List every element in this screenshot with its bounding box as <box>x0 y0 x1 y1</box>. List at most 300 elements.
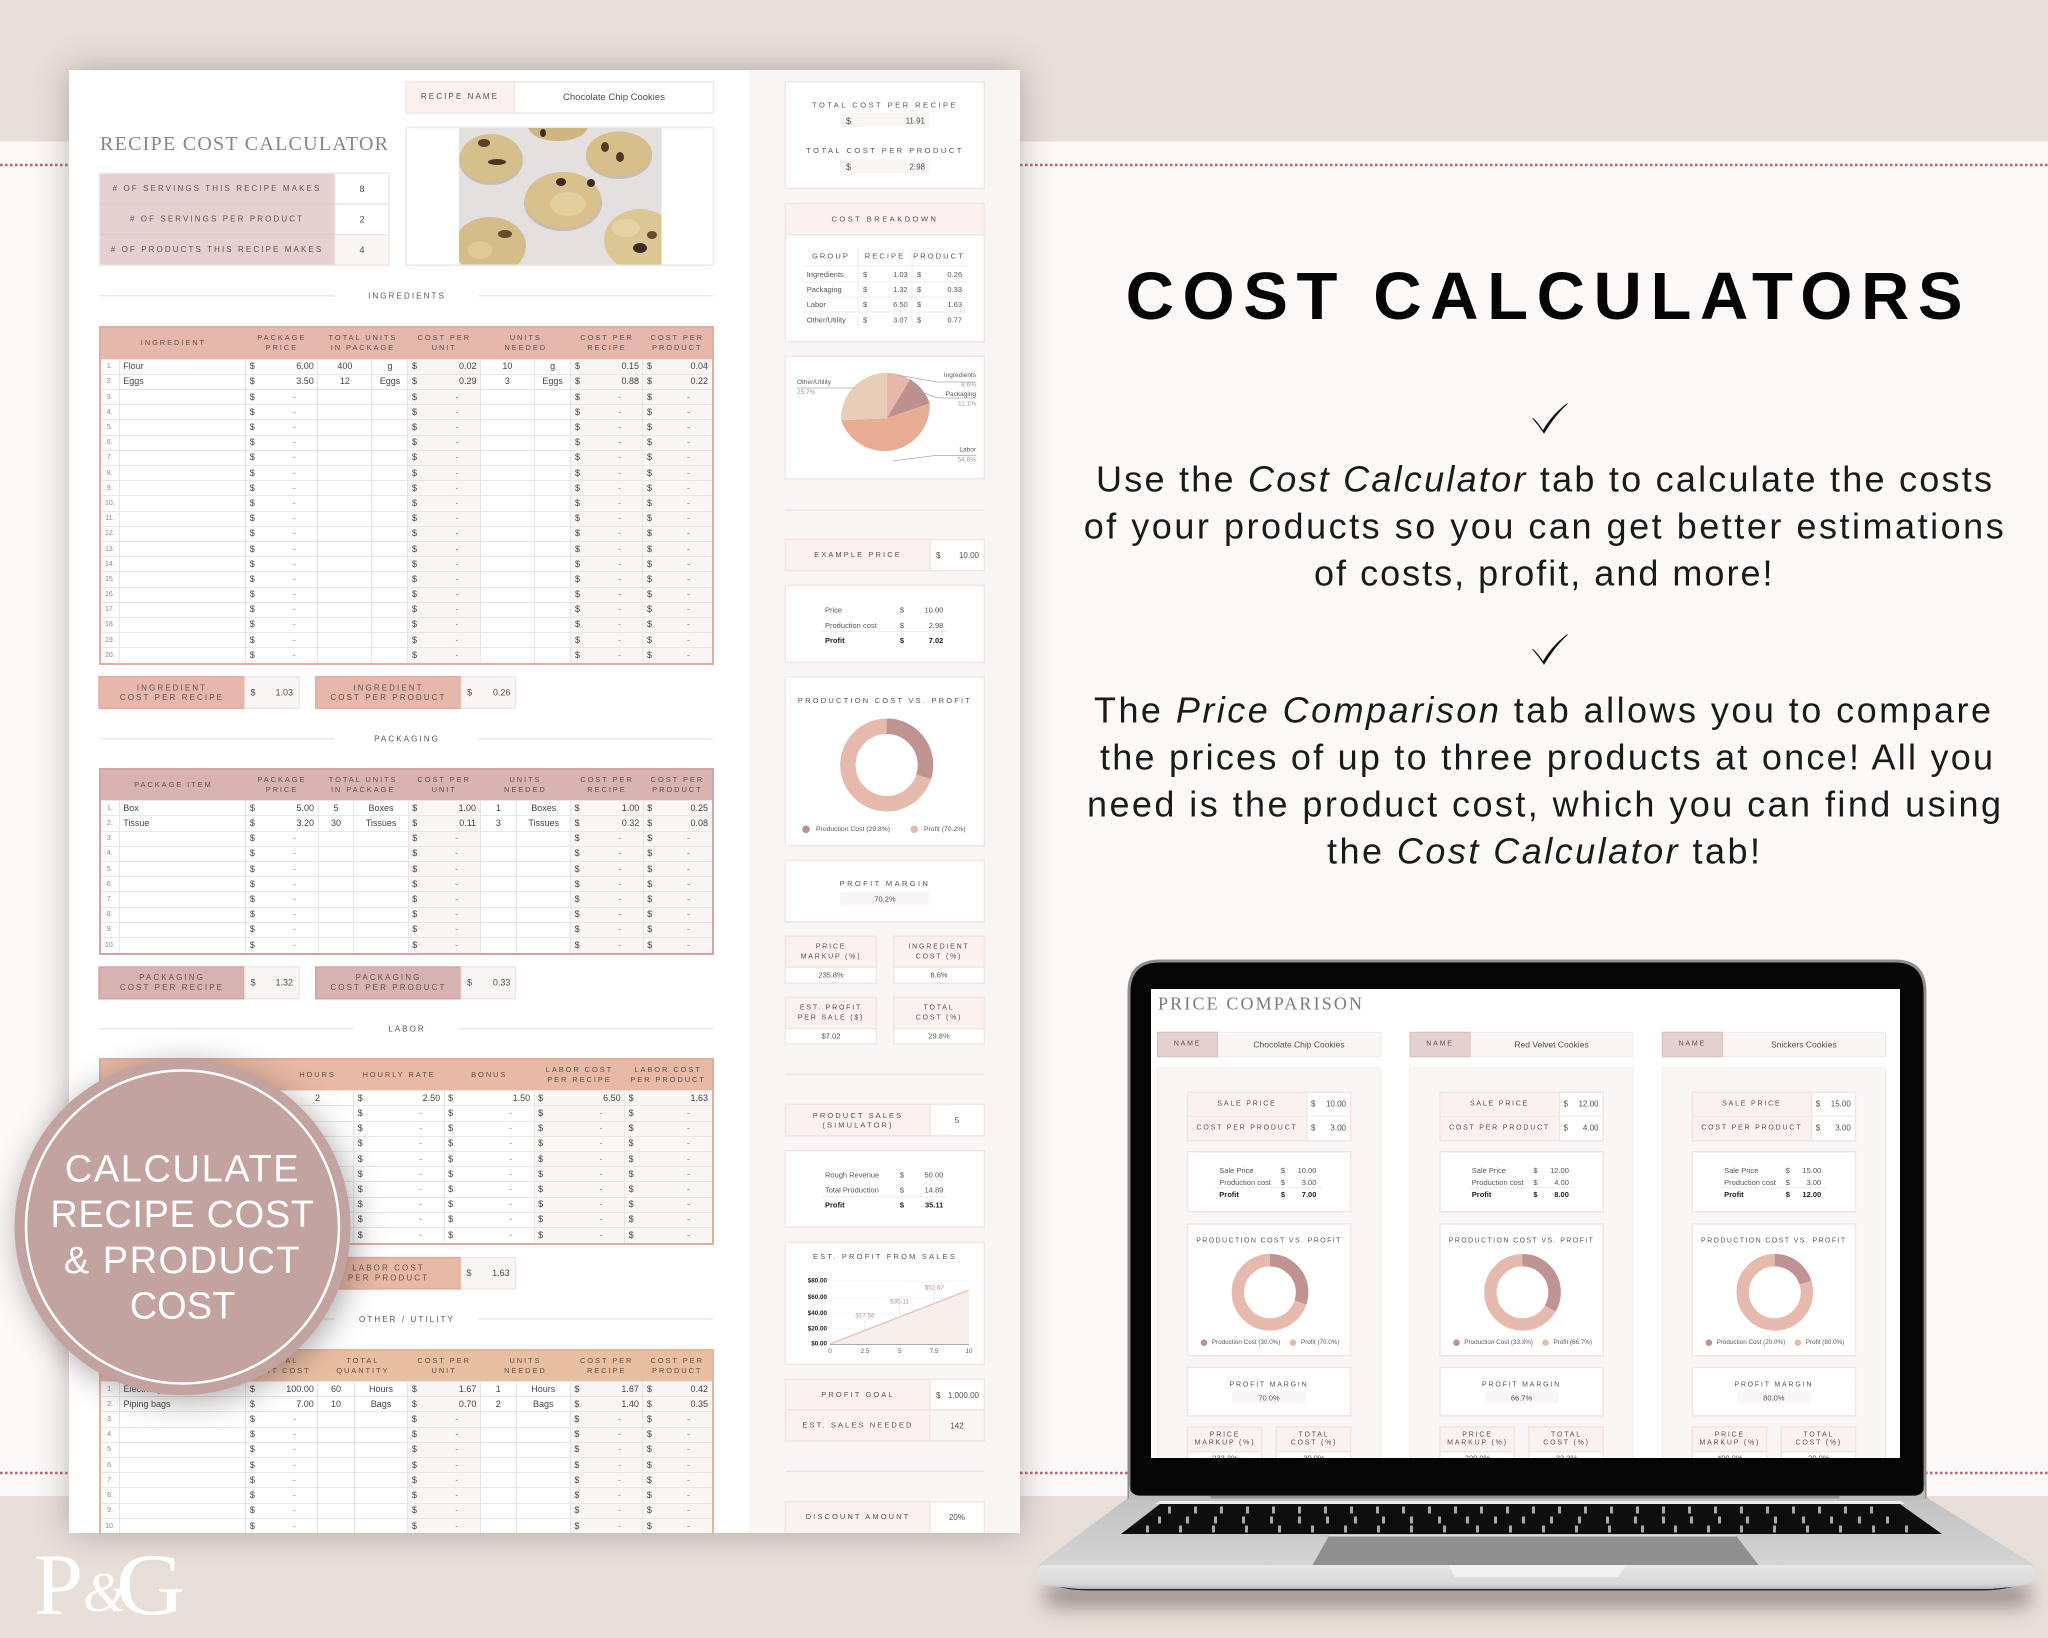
table: labor: BONUS <box>471 1070 507 1079</box>
product column 3: Snickers Cookies: $ <box>1816 1124 1821 1132</box>
table: packaging: - <box>293 864 296 874</box>
table: ingredients: 0.15 <box>621 361 639 371</box>
discount amount field: DISCOUNT AMOUNT <box>806 1512 910 1521</box>
table: ingredients: - <box>455 422 458 432</box>
table: other / utility: - <box>455 1414 458 1424</box>
table: packaging: - <box>293 833 296 843</box>
table: ingredients: $ <box>412 528 417 538</box>
table: other / utility: $ <box>574 1505 579 1515</box>
table: ingredients: - <box>618 528 621 538</box>
table: ingredients: - <box>455 619 458 629</box>
packaging cost per product box: $ <box>467 978 472 988</box>
table: ingredients: $ <box>647 437 652 447</box>
product column 1: Chocolate Chip Cookies: 233.3% <box>1212 1454 1238 1462</box>
pie chart: cost breakdown: 11.1% <box>958 400 976 408</box>
table: ingredients: - <box>687 528 690 538</box>
panel: cost breakdown: $ <box>917 270 922 279</box>
table: labor: 1. <box>107 1095 113 1102</box>
product column 3: Snickers Cookies: COST (%) <box>1796 1440 1842 1446</box>
table: packaging: 5.00 <box>296 803 314 813</box>
table: labor: - <box>509 1214 512 1224</box>
table: ingredients: - <box>293 422 296 432</box>
table: packaging: - <box>618 848 621 858</box>
table: ingredients: - <box>293 513 296 523</box>
table: other / utility: $ <box>412 1521 417 1531</box>
table: ingredients: $ <box>575 407 580 417</box>
table: packaging: - <box>455 940 458 950</box>
example price field <box>785 540 984 571</box>
table: ingredients: 1. <box>107 363 113 370</box>
product column 2: Red Velvet Cookies: $ <box>1564 1100 1568 1108</box>
product column 2: Red Velvet Cookies: $ <box>1533 1166 1538 1175</box>
table: labor: $ <box>448 1138 453 1148</box>
labor cost per recipe box <box>99 1258 299 1289</box>
table: other / utility: 10. <box>105 1523 115 1530</box>
panel: cost breakdown: 0.33 <box>947 285 962 294</box>
recipe name field: RECIPE NAME <box>421 92 499 101</box>
profit goal fields: 1,000.00 <box>948 1391 980 1400</box>
table: labor: $ <box>538 1108 543 1118</box>
area chart: est profit from sales: $17.56 <box>855 1312 875 1320</box>
table: other / utility: - <box>293 1521 296 1531</box>
text block: price comparison tab: need is the product cost, which you can find using <box>1087 784 2001 825</box>
table: ingredients: $ <box>647 528 652 538</box>
text block: price comparison tab: The Price Comparison tab allows you to compare <box>1094 690 1991 731</box>
servings table: # OF SERVINGS THIS RECIPE MAKES <box>113 184 321 193</box>
table: labor: $ <box>358 1184 363 1194</box>
product column 2: Red Velvet Cookies: Production Cost (33.3%) <box>1464 1339 1533 1346</box>
area chart: est profit from sales: 2.5 <box>861 1348 870 1355</box>
text block: cost calculator tab: of your products so you can get better estimations <box>1084 506 2004 547</box>
table: labor: 2. <box>107 1110 113 1117</box>
table: ingredients: 20. <box>105 652 115 659</box>
table: labor: - <box>419 1214 422 1224</box>
icon: check mark 2 <box>1532 634 1568 664</box>
profit goal fields: $ <box>936 1391 941 1400</box>
table: other / utility: - <box>293 1429 296 1439</box>
table: ingredients: 5. <box>107 424 113 431</box>
table: labor: $ <box>629 1199 634 1209</box>
product column 2: Red Velvet Cookies: Sale Price <box>1472 1166 1506 1175</box>
table: ingredients: - <box>293 559 296 569</box>
product column 2: Red Velvet Cookies: 66.7% <box>1511 1394 1532 1402</box>
product column 3: Snickers Cookies: 3.00 <box>1835 1124 1851 1132</box>
packaging cost per recipe box: 1.32 <box>275 978 293 988</box>
table: other / utility: $ <box>250 1505 255 1515</box>
table: ingredients: - <box>687 437 690 447</box>
table: labor: - <box>509 1154 512 1164</box>
table: other / utility: $ <box>250 1460 255 1470</box>
panel: cost breakdown: 0.26 <box>947 270 962 279</box>
table: packaging: - <box>618 833 621 843</box>
table: labor: 5. <box>107 1156 113 1163</box>
panel: cost breakdown: 3.07 <box>893 316 908 324</box>
recipe photo: cookies <box>405 126 714 266</box>
table: packaging: $ <box>412 879 417 889</box>
example price field: EXAMPLE PRICE <box>814 550 902 559</box>
table: labor: - <box>509 1184 512 1194</box>
table: ingredients: $ <box>647 650 652 660</box>
panel: profit margin: PROFIT MARGIN <box>840 879 930 888</box>
table: other / utility: UNIT <box>432 1366 457 1375</box>
callout badge: calculate recipe cost and product cost: & PRODUCT <box>64 1240 301 1282</box>
table: ingredients: $ <box>412 376 417 386</box>
metric: total cost <box>894 998 984 1044</box>
table: other / utility: 0.42 <box>690 1384 708 1394</box>
table: packaging: IN PACKAGE <box>331 785 395 794</box>
table: other / utility: $ <box>412 1460 417 1470</box>
table: packaging: $ <box>412 894 417 904</box>
table: ingredients: - <box>293 392 296 402</box>
table: other / utility: $ <box>647 1505 652 1515</box>
product column 1: Chocolate Chip Cookies: TOTAL <box>1299 1432 1329 1438</box>
example price field: 10.00 <box>959 551 980 560</box>
packaging cost per product box: 0.33 <box>493 978 510 988</box>
table: ingredients <box>99 326 714 665</box>
table: packaging: 0.11 <box>459 818 476 828</box>
table: ingredients: $ <box>647 604 652 614</box>
ingredient cost per recipe box <box>99 677 299 708</box>
table: labor: LABOR COST <box>546 1065 613 1074</box>
table: packaging: - <box>293 879 296 889</box>
table: labor: 10. <box>105 1232 115 1239</box>
table: other / utility: - <box>618 1475 621 1485</box>
section heading: packaging: PACKAGING <box>374 734 440 744</box>
table: ingredients: g <box>550 361 555 371</box>
area chart: est profit from sales: $35.11 <box>890 1298 909 1306</box>
table: ingredients: - <box>687 468 690 478</box>
panel: profit margin: 70.2% <box>874 894 896 904</box>
table: labor: $ <box>358 1199 363 1209</box>
pie chart: cost breakdown: 8.6% <box>961 382 976 388</box>
labor cost per recipe box: LABOR COST <box>136 1264 208 1272</box>
table: labor: $ <box>538 1169 543 1179</box>
table: labor: $ <box>538 1214 543 1224</box>
table: ingredients: 12 <box>340 376 350 386</box>
panel: cost breakdown: GROUP <box>812 252 850 260</box>
table: packaging: $ <box>250 848 255 858</box>
product column 1: Chocolate Chip Cookies: $ <box>1311 1100 1316 1108</box>
ingredient cost per product box: COST PER PRODUCT <box>330 693 447 702</box>
pie chart: cost breakdown <box>785 356 984 479</box>
table: labor: $ <box>538 1199 543 1209</box>
product column 3: Snickers Cookies: Production cost <box>1724 1178 1777 1187</box>
pie chart: cost breakdown: Labor <box>959 446 977 454</box>
table: ingredients: $ <box>412 619 417 629</box>
table: packaging: - <box>455 879 458 889</box>
table: other / utility: - <box>687 1460 690 1470</box>
table: other / utility: QUANTITY <box>336 1366 389 1375</box>
table: other / utility: - <box>293 1414 296 1424</box>
table: packaging: $ <box>647 864 652 874</box>
table: ingredients: 16. <box>105 591 115 598</box>
icon: check mark 1 <box>1532 404 1568 433</box>
table: ingredients: PACKAGE <box>257 333 306 342</box>
area chart: est profit from sales: $60.00 <box>808 1294 827 1301</box>
labor cost per recipe box: 6.50 <box>275 1268 293 1278</box>
table: other / utility: 0.70 <box>459 1399 476 1409</box>
product sales simulator field: 5 <box>955 1116 960 1125</box>
table: labor: - <box>600 1199 603 1209</box>
table: ingredients: $ <box>575 559 580 569</box>
table: ingredients: $ <box>575 437 580 447</box>
product column 1: Chocolate Chip Cookies: $ <box>1281 1190 1286 1199</box>
metric: total cost: 29.8% <box>928 1032 950 1040</box>
table: ingredients: - <box>293 650 296 660</box>
table: ingredients: $ <box>647 407 652 417</box>
table: ingredients: UNIT <box>432 343 457 352</box>
table: other / utility: 9. <box>107 1507 113 1514</box>
table: packaging: $ <box>647 848 652 858</box>
table: packaging: Tissue <box>123 818 149 828</box>
table: labor: $ <box>448 1230 453 1240</box>
product column 2: Red Velvet Cookies: NAME <box>1426 1040 1454 1048</box>
table: labor: PER RECIPE <box>547 1075 612 1084</box>
panel: cost breakdown: Other/Utility <box>807 316 846 324</box>
area chart: est profit from sales <box>785 1242 984 1364</box>
ingredient cost per recipe box: 1.03 <box>275 688 293 698</box>
table: packaging: - <box>687 940 690 950</box>
packaging cost per product box: COST PER PRODUCT <box>330 983 447 992</box>
product column 3: Snickers Cookies: $ <box>1816 1100 1821 1108</box>
table: ingredients: - <box>455 528 458 538</box>
table: packaging: - <box>618 909 621 919</box>
table: ingredients: - <box>455 392 458 402</box>
table: labor: - <box>600 1123 603 1133</box>
table: ingredients: $ <box>250 483 255 493</box>
table: other / utility: 7.00 <box>296 1399 314 1409</box>
product column 2: Red Velvet Cookies <box>1410 1032 1633 1472</box>
table: labor: - <box>600 1214 603 1224</box>
table: other / utility: $ <box>412 1475 417 1485</box>
table: other / utility: - <box>687 1505 690 1515</box>
product column 3: Snickers Cookies: $ <box>1786 1166 1791 1175</box>
panel: sales profit summary: 35.11 <box>925 1200 943 1210</box>
table: ingredients: - <box>687 483 690 493</box>
packaging cost per product box: PACKAGING <box>356 973 421 982</box>
table: ingredients: $ <box>647 498 652 508</box>
table: other / utility: - <box>618 1521 621 1531</box>
text block: price comparison tab <box>1087 690 2001 872</box>
table: packaging: NEEDED <box>504 785 547 794</box>
table: labor: - <box>687 1169 690 1179</box>
panel: sales profit summary <box>785 1151 984 1227</box>
table: packaging: $ <box>412 864 417 874</box>
table: other / utility: $ <box>574 1460 579 1470</box>
table: other / utility: - <box>618 1490 621 1500</box>
table: labor: $ <box>358 1093 363 1103</box>
panel: sales profit summary: Total Production <box>825 1186 879 1194</box>
table: labor: 6. <box>107 1171 113 1178</box>
table: labor: $ <box>629 1123 634 1133</box>
product column 3: Snickers Cookies: 3.00 <box>1807 1178 1821 1187</box>
table: ingredients: - <box>618 559 621 569</box>
table: other / utility: $ <box>647 1429 652 1439</box>
table: ingredients: $ <box>250 468 255 478</box>
table: ingredients: 15. <box>105 576 115 583</box>
screen title: PRICE COMPARISON <box>1158 994 1362 1014</box>
table: ingredients: - <box>687 574 690 584</box>
packaging cost per recipe box: $ <box>250 978 256 988</box>
table: ingredients: $ <box>412 483 417 493</box>
callout badge: calculate recipe cost and product cost: COST <box>130 1286 235 1328</box>
pie chart: cost breakdown: Other/Utility <box>797 379 832 386</box>
product column 1: Chocolate Chip Cookies: SALE PRICE <box>1217 1100 1277 1108</box>
table: ingredients: $ <box>647 589 652 599</box>
callout badge: calculate recipe cost and product cost <box>0 1046 374 1420</box>
panel: profit summary: 10.00 <box>925 606 943 614</box>
product column 3: Snickers Cookies: Profit (80.0%) <box>1806 1339 1844 1346</box>
table: ingredients: - <box>687 407 690 417</box>
table: packaging: $ <box>575 924 580 934</box>
table: other / utility: $ <box>574 1429 579 1439</box>
table: ingredients: $ <box>647 619 652 629</box>
product column 2: Red Velvet Cookies: MARKUP (%) <box>1447 1440 1508 1446</box>
table: packaging: - <box>687 848 690 858</box>
table: other / utility: - <box>618 1444 621 1454</box>
table: ingredients: - <box>618 513 621 523</box>
discount amount field: 20% <box>949 1513 965 1522</box>
panel: profit summary: 7.02 <box>929 636 943 645</box>
callout badge: calculate recipe cost and product cost: RECIPE COST <box>50 1194 315 1236</box>
table: other / utility: - <box>455 1460 458 1470</box>
product column 2: Red Velvet Cookies: PROFIT MARGIN <box>1482 1382 1561 1388</box>
panel: profit summary: Production cost <box>825 621 878 630</box>
table: packaging: $ <box>575 818 580 828</box>
table: ingredients: $ <box>575 619 580 629</box>
table: packaging: $ <box>250 924 255 934</box>
table: labor: $ <box>448 1093 453 1103</box>
table: labor: - <box>687 1184 690 1194</box>
table: ingredients: - <box>687 498 690 508</box>
table: ingredients: - <box>455 559 458 569</box>
table: other / utility <box>99 1349 714 1535</box>
table: ingredients: g <box>387 361 392 371</box>
product column 3: Snickers Cookies: COST PER PRODUCT <box>1701 1124 1802 1132</box>
table: labor: - <box>419 1138 422 1148</box>
panel: sales profit summary: $ <box>900 1200 905 1210</box>
table: ingredients: - <box>455 498 458 508</box>
table: ingredients: - <box>455 513 458 523</box>
table: labor: LABOR COST <box>634 1065 702 1074</box>
table: packaging: - <box>687 833 690 843</box>
product column 2: Red Velvet Cookies: 12.00 <box>1550 1166 1569 1175</box>
table: ingredients: - <box>455 604 458 614</box>
table: other / utility: Bags <box>533 1399 554 1409</box>
table: packaging: $ <box>412 833 417 843</box>
table: ingredients: $ <box>647 574 652 584</box>
product column 3: Snickers Cookies: PRODUCTION COST VS. PROFIT <box>1701 1238 1847 1244</box>
table: packaging: $ <box>647 940 652 950</box>
table: labor: - <box>419 1184 422 1194</box>
table: packaging: - <box>293 848 296 858</box>
title: RECIPE COST CALCULATOR <box>100 133 389 155</box>
ingredient cost per product box: 0.26 <box>493 688 510 698</box>
donut chart: production cost vs profit: PRODUCTION COST VS. PROFIT <box>798 696 972 705</box>
table: packaging: PACKAGE <box>257 775 306 784</box>
table: ingredients: - <box>687 635 690 645</box>
table: packaging: COST PER <box>651 775 704 784</box>
table: ingredients: - <box>687 392 690 402</box>
ingredient cost per recipe box: $ <box>250 688 256 698</box>
table: ingredients: Flour <box>123 361 144 371</box>
table: other / utility: TOTAL <box>265 1356 298 1365</box>
table: packaging: - <box>618 940 621 950</box>
table: ingredients: $ <box>412 498 417 508</box>
pie chart: cost breakdown: Ingredients <box>944 372 977 379</box>
table: labor: - <box>419 1108 422 1118</box>
table: other / utility: $ <box>647 1490 652 1500</box>
table: packaging: RECIPE <box>587 785 627 794</box>
table: packaging: $ <box>575 894 580 904</box>
product column 3: Snickers Cookies: $ <box>1786 1190 1791 1199</box>
laptop screen: price comparison <box>1151 989 1900 1472</box>
packaging cost per recipe box: COST PER RECIPE <box>120 983 224 992</box>
table: packaging: PRODUCT <box>652 785 703 794</box>
table: ingredients: 6.00 <box>296 361 314 371</box>
donut chart: production cost vs profit <box>785 677 984 846</box>
table: ingredients: - <box>687 650 690 660</box>
metric: total cost: TOTAL <box>924 1004 954 1012</box>
table: packaging: 0.25 <box>690 803 708 813</box>
product column 2: Red Velvet Cookies: $ <box>1564 1124 1568 1132</box>
panel: total cost: TOTAL COST PER PRODUCT <box>806 146 964 155</box>
table: packaging: $ <box>250 879 255 889</box>
table: other / utility: $ <box>250 1429 255 1439</box>
table: ingredients: $ <box>250 452 255 462</box>
table: ingredients: 13. <box>105 546 115 553</box>
table: packaging: 3.20 <box>296 818 314 828</box>
table: ingredients: $ <box>412 407 417 417</box>
table: labor: $ <box>448 1123 453 1133</box>
table: other / utility: - <box>618 1505 621 1515</box>
table: other / utility: Electricity <box>124 1384 162 1394</box>
table: ingredients: $ <box>575 604 580 614</box>
table: packaging: 2. <box>107 820 113 827</box>
product column 1: Chocolate Chip Cookies: 3.00 <box>1302 1178 1316 1187</box>
table: packaging: $ <box>250 833 255 843</box>
table: labor: $ <box>629 1154 634 1164</box>
table: ingredients: - <box>618 468 621 478</box>
product column 1: Chocolate Chip Cookies: Sale Price <box>1219 1166 1253 1175</box>
table: other / utility: - <box>618 1414 621 1424</box>
product column 2: Red Velvet Cookies: 33.3% <box>1556 1454 1577 1462</box>
labor cost per product box: PER PRODUCT <box>348 1273 429 1282</box>
product sales simulator field <box>785 1104 984 1136</box>
table: packaging: - <box>293 940 296 950</box>
servings table: # OF PRODUCTS THIS RECIPE MAKES <box>111 245 323 254</box>
area chart: est profit from sales: 0 <box>828 1348 832 1355</box>
table: ingredients: $ <box>575 376 580 386</box>
panel: cost breakdown <box>785 204 984 342</box>
product column 1: Chocolate Chip Cookies: PRODUCTION COST VS. PROFIT <box>1196 1238 1342 1244</box>
table: labor: $ <box>629 1138 634 1148</box>
table: other / utility: 60 <box>331 1384 341 1394</box>
table: other / utility: 2 <box>496 1399 501 1409</box>
product sales simulator field: PRODUCT SALES <box>813 1111 903 1120</box>
table: ingredients: $ <box>647 422 652 432</box>
table: packaging: - <box>293 909 296 919</box>
labor cost per product box: LABOR COST <box>352 1264 425 1272</box>
table: labor: - <box>687 1138 690 1148</box>
table: labor: $ <box>629 1230 634 1240</box>
table: other / utility: - <box>687 1429 690 1439</box>
panel: profit summary: 2.98 <box>929 621 943 630</box>
table: ingredients: - <box>293 452 296 462</box>
table: ingredients: $ <box>575 589 580 599</box>
table: other / utility: 4. <box>107 1431 113 1438</box>
table: ingredients: - <box>687 619 690 629</box>
